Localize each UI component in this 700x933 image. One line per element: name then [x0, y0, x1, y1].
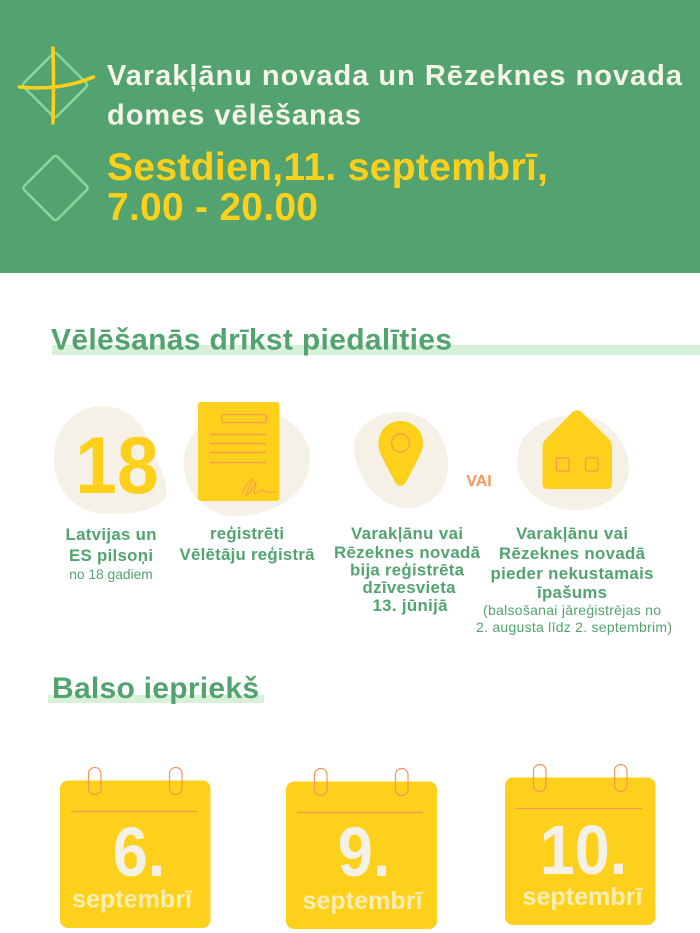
item: property: pieder nekustamais [490, 564, 654, 583]
item: citizens from 18 [54, 406, 167, 582]
date: Sestdien,11. septembrī, [107, 146, 548, 189]
item: registered: Vēlētāju reģistrā [180, 545, 315, 564]
label: Varakļānu vai [516, 524, 628, 543]
time: 7.00 - 20.00 [107, 186, 318, 229]
number 18: 18 [75, 419, 159, 511]
connector: VAI: VAI [466, 473, 492, 490]
calendar: 9 September [286, 768, 437, 929]
calendar: 10 September [505, 764, 656, 925]
item: property: Rēzeknes novadā [499, 544, 646, 563]
item: property: 2. augusta līdz 2. septembrim) [476, 619, 672, 635]
icon: document [198, 402, 280, 501]
heading: who may participate: Vēlēšanās drīkst piedalīties [51, 324, 452, 356]
calendar: 10 September: 10. [540, 812, 627, 890]
calendar: 6 September: 6. [113, 814, 165, 892]
item: residence [334, 412, 481, 615]
calendar: 9 September: septembrī [302, 887, 424, 915]
label: Latvijas un [66, 525, 156, 544]
item: residence: dzīvesvieta [362, 578, 456, 597]
item: residence: 13. jūnijā [372, 596, 448, 615]
subtitle: domes vēlēšanas [107, 100, 361, 132]
header band [0, 0, 700, 273]
item: property: (balsošanai jāreģistrējas no [483, 602, 661, 618]
item: citizens from 18: ES pilsoņi [69, 546, 153, 565]
icon: empty diamond [22, 155, 89, 221]
label: Varakļānu vai [351, 524, 463, 543]
label: reģistrēti [210, 524, 284, 543]
item: citizens from 18: no 18 gadiem [69, 567, 153, 582]
calendar: 9 September: 9. [338, 814, 390, 892]
blob [54, 406, 167, 514]
icon: checked diamond [20, 48, 94, 123]
calendar: 6 September [60, 768, 210, 928]
item: registered [180, 402, 315, 564]
heading: vote early: Balso iepriekš [52, 672, 259, 705]
calendar: 6 September: septembrī [72, 886, 193, 914]
blob [517, 415, 629, 510]
heading: who may participate [51, 324, 700, 356]
item: property [476, 410, 672, 635]
item: residence: Rēzeknes novadā [334, 543, 481, 562]
icon: house [542, 410, 612, 489]
item: property: īpašums [536, 583, 607, 602]
blob [354, 412, 448, 508]
icon: map pin [378, 421, 423, 486]
blob [184, 408, 310, 516]
calendar: 10 September: septembrī [522, 883, 644, 911]
title: Varakļānu novada un Rēzeknes novada [107, 60, 683, 92]
item: residence: bija reģistrēta [350, 560, 465, 580]
